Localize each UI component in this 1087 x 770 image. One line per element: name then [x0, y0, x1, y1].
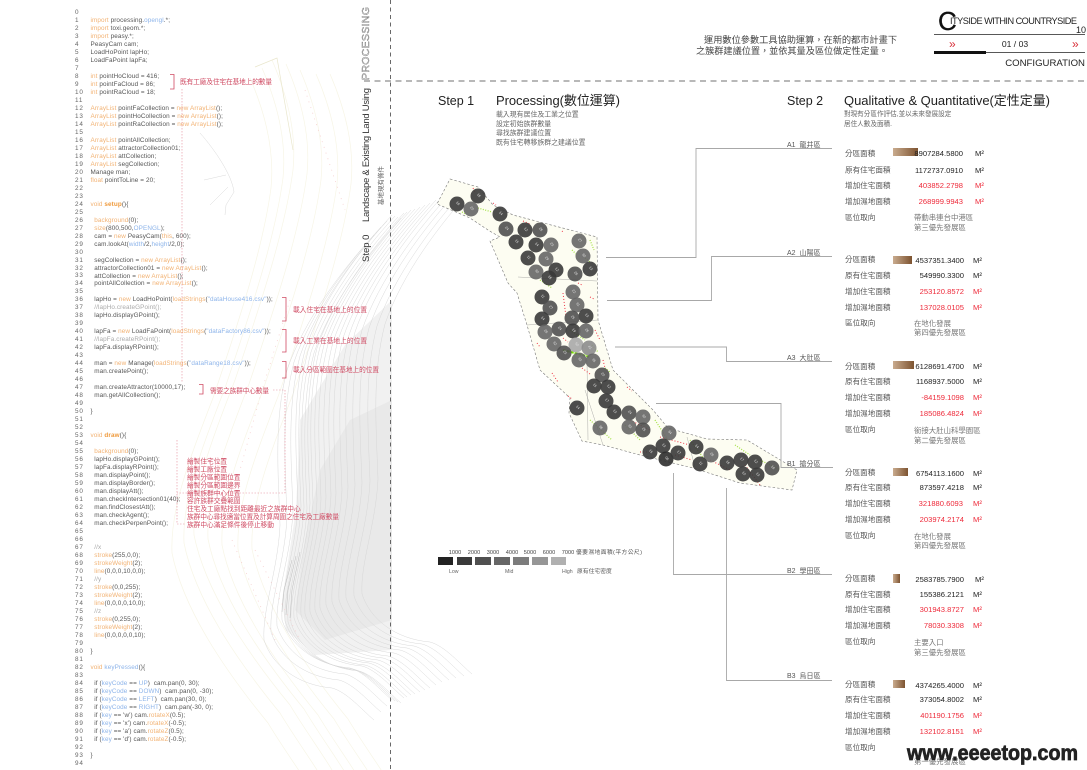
zone A3: 1168937.5000 [916, 377, 964, 386]
zone A2: 253120.8572 [920, 287, 964, 296]
cluster circles: 17 [739, 457, 745, 462]
zone B2: M² [973, 605, 982, 614]
cluster circles: 23 [549, 242, 555, 247]
cluster circles: 13 [588, 266, 594, 271]
zone A1: 403852.2798 [919, 181, 963, 190]
cluster circles: 32 [552, 341, 558, 346]
zone B3: 分區面積 [845, 679, 876, 689]
cluster circles: 11 [540, 294, 545, 299]
step 2 heading [787, 93, 1050, 128]
cluster circles: 17 [604, 398, 610, 403]
cluster circles: 11 [526, 255, 531, 260]
zone A3 [787, 353, 982, 445]
zone B3: M² [973, 727, 982, 736]
cluster circles: 12 [753, 459, 759, 464]
zone B1: 增加濕地面積 [845, 514, 891, 524]
zone B2: 區位取向 [845, 636, 875, 646]
zone B2: 78030.3308 [924, 621, 964, 630]
density legend: 5000 [524, 550, 536, 556]
cluster circles: 14 [534, 242, 540, 247]
cluster circles: 18 [770, 465, 776, 470]
zone B1: 在地化發展 [914, 532, 952, 541]
vertical section titles: Step 0 [361, 235, 372, 262]
zone B2: M² [973, 590, 982, 599]
code annotations: 載入工業在基地上的位置 [293, 336, 367, 345]
zone A1: 268999.9943 [919, 197, 963, 206]
zone A1: 1172737.0910 [915, 166, 963, 175]
code annotations: 容許族群交疊範圍 [187, 496, 241, 505]
zone B3: 原有住宅面積 [845, 694, 891, 704]
zone A2: 第四優先發展區 [914, 328, 966, 337]
zone A2 [787, 248, 982, 337]
zone A3: -84159.1098 [921, 393, 964, 402]
zone A1: M² [975, 166, 984, 175]
cluster circles: 16 [547, 275, 553, 280]
cluster circles: 25 [570, 315, 576, 320]
zone B2: 第三優先發展區 [914, 648, 966, 657]
step 1 heading: 設定初始族群數量 [496, 119, 551, 128]
cluster circles: 24 [504, 226, 510, 231]
code annotations: 族群中心尋找適當位置及計算周圍之住宅及工廠數量 [187, 512, 339, 521]
cluster circles: 30 [534, 269, 540, 274]
watermark: www.eeeetop.com [906, 742, 1078, 765]
zone B3: 區位取向 [845, 742, 875, 752]
code annotations: 載入住宅在基地上的位置 [293, 305, 367, 314]
header block: C [938, 6, 957, 36]
vertical section titles: Landscape & Existing Land Using [361, 88, 372, 222]
zone A1: A1 龍井區 [787, 140, 820, 149]
intro text: 運用數位參數工具協助運算，在新的都市計畫下 [704, 34, 897, 45]
vertical section titles: 基地現有條件 [376, 166, 385, 205]
zone A1: M² [975, 181, 984, 190]
zone A2: 原有住宅面積 [845, 270, 891, 280]
cluster circles: 19 [571, 328, 577, 333]
cluster circles: 24 [557, 326, 563, 331]
header block: CONFIGURATION [1005, 58, 1085, 69]
zone A2: 增加濕地面積 [845, 302, 891, 312]
density legend: 優要濕地面積(平方公尺) [576, 548, 642, 556]
zone B2: M² [973, 621, 982, 630]
zone B1: 873597.4218 [920, 483, 964, 492]
density legend: High [562, 569, 573, 575]
cluster circles: 26 [538, 227, 544, 232]
density legend: 原有住宅密度 [577, 567, 612, 575]
zone B2: 原有住宅面積 [845, 589, 891, 599]
zone A2: 4537351.3400 [915, 256, 964, 265]
zone A1: 帶動串連台中港區 [914, 213, 974, 222]
zone A1: 第三優先發展區 [914, 223, 966, 232]
cluster circles: 14 [498, 211, 504, 216]
zone B3 [787, 671, 982, 766]
cluster circles: 24 [627, 410, 633, 415]
code annotations: 住宅及工廠點找到距離最近之族群中心 [187, 504, 301, 513]
zone B1: M² [973, 499, 982, 508]
density legend: 4000 [506, 550, 518, 556]
site boundary [437, 179, 797, 490]
zone A3: 增加濕地面積 [845, 408, 891, 418]
cluster circles: 25 [641, 427, 647, 432]
zone A2: 在地化發展 [914, 319, 952, 328]
step 1 heading: Processing(數位運算) [496, 93, 620, 108]
zone B3: 373054.8002 [920, 695, 964, 704]
code annotations: 族群中心滿足條件後停止移動 [187, 520, 274, 529]
cluster circles: 33 [577, 357, 583, 362]
cluster circles: 13 [755, 472, 761, 477]
cluster circles: 41 [587, 345, 593, 350]
zone A3: 分區面積 [845, 361, 876, 371]
zone A1: M² [975, 149, 984, 158]
cluster circles: 15 [592, 383, 598, 388]
density legend: 3000 [487, 550, 499, 556]
zone B2: 2583785.7900 [915, 575, 964, 584]
zone A2: 增加住宅面積 [845, 286, 891, 296]
zone A3: 6128691.4700 [915, 362, 964, 371]
cluster circles: 28 [543, 329, 549, 334]
cluster circles: 20 [600, 372, 606, 377]
zone B2 [787, 566, 984, 657]
zone B2: 增加住宅面積 [845, 604, 891, 614]
zone A2: 分區面積 [845, 254, 876, 264]
cluster circles: 33 [627, 424, 633, 429]
zone A3: M² [973, 362, 982, 371]
cluster circles: 28 [709, 452, 715, 457]
zone A1: M² [975, 197, 984, 206]
code annotations: 載入分區範圍在基地上的位置 [293, 365, 379, 374]
zone B1: 增加住宅面積 [845, 498, 891, 508]
cluster circles: 36 [598, 425, 604, 430]
code annotations: 需要之族群中心數量 [210, 386, 269, 395]
cluster circles: 17 [676, 450, 682, 455]
processing source code: import processing.opengl.*; import toxi.geom.*; import peasy.*; PeasyCam cam; LoadHoPoint lapHo; LoadFaPoint lapFa; int pointHoCloud = 416; int pointFaCloud = 86; int pointRaCloud = 18; ArrayList pointFaCollection = new ArrayList(); ArrayList pointHoCollection = new ArrayList(); ArrayList pointRaCollection = new ArrayList(); ArrayList pointAllCollection; ArrayList attractorCollection01; ArrayList attCollection; ArrayList segCollection; Manage man; float pointToLine = 20; void setup(){ background(0); size(800,500,OPENGL); cam = new PeasyCam(this, 600); cam.lookAt(width/2,height/2,0); segCollection = new ArrayList(); attractorCollection01 = new ArrayList(); attCollection = new ArrayList(); pointAllCollection = new ArrayList(); lapHo = new LoadHoPoint(loadStrings("dataHouse416.csv")); //lapHo.createGPoint(); lapHo.displayGPoint(); lapFa = new LoadFaPoint(loadStrings("dataFactory86.csv")); //lapFa.createRPoint(); lapFa.displayRPoint(); man = new Manage(loadStrings("dataRange18.csv")); man.createPoint(); man.createAttractor(10000,17); man.getAllCollection(); } void draw(){ background(0); lapHo.displayGPoint(); lapFa.displayRPoint(); man.displayPoint(); man.displayBorder(); man.displayAtt(); man.checkIntersection01(40); man.findClosestAtt(); man.checkAgent(); man.checkPerpenPoint(); //x stroke(255,0,0); strokeWeight(2); line(0,0,0,10,0,0); //y stroke(0,0,255); strokeWeight(2); line(0,0,0,0,10,0); //z stroke(0,255,0); strokeWeight(2); line(0,0,0,0,0,10); } void keyPressed(){ if (keyCode == UP) cam.pan(0, 30); if (keyCode == DOWN) cam.pan(0, -30); if (keyCode == LEFT) cam.pan(30, 0); if (keyCode == RIGHT) cam.pan(-30, 0); if (key == 'w') cam.rotateX(0.5); if (key == 'x') cam.rotateX(-0.5); if (key == 'a') cam.rotateZ(0.5); if (key == 'd') cam.rotateZ(-0.5); } [90, 17, 273, 759]
header block [934, 6, 1086, 69]
step 1 heading [438, 93, 620, 146]
zone B3: 增加濕地面積 [845, 726, 891, 736]
green dots [462, 208, 780, 470]
density legend: Low [449, 569, 459, 575]
zone A2: A2 山陽區 [787, 248, 820, 257]
cluster circles: 29 [544, 256, 550, 261]
step 1 heading: Step 1 [438, 94, 474, 108]
cluster circles: 28 [573, 271, 579, 276]
code annotations: 繪製分區範圍邊界 [187, 480, 241, 490]
density legend: Mid [505, 569, 513, 575]
zone B1: 6754113.1600 [916, 469, 964, 478]
cluster circles: 12 [554, 267, 560, 272]
zone A3: 區位取向 [845, 424, 875, 434]
cluster circles: 08 [664, 456, 670, 461]
zone B3: 401190.1756 [920, 711, 964, 720]
cluster circles: 10 [741, 471, 747, 476]
cluster circles [450, 188, 780, 482]
cluster circles: 34 [667, 430, 673, 435]
zone B1: 第四優先發展區 [914, 541, 966, 550]
header block: 01 / 03 [1002, 39, 1028, 49]
zone A1 [787, 140, 984, 232]
vertical section titles: PROCESSING [360, 7, 372, 80]
cluster circles: 27 [577, 238, 583, 243]
cluster circles: 31 [575, 302, 581, 307]
cluster circles: 14 [540, 316, 546, 321]
header block: 10 [1076, 25, 1086, 35]
cluster circles: 27 [548, 305, 554, 310]
cluster circles: 16 [476, 193, 482, 198]
zone A1: 區位取向 [845, 212, 875, 222]
density legend: 2000 [468, 550, 480, 556]
cluster circles: 13 [661, 443, 667, 448]
zone B2: 155386.2121 [920, 590, 964, 599]
line numbers: 0 1 2 3 4 5 6 7 8 9 10 11 12 13 14 15 16 17 18 19 20 21 22 23 24 25 26 27 28 29 30 31 32 33 34 35 36 37 38 39 40 41 42 43 44 45 46 47 48 49 50 51 52 53 54 55 56 57 58 59 60 61 62 63 64 65 66 67 68 69 70 71 72 73 74 75 76 77 78 79 80 81 82 83 84 85 86 87 88 89 90 91 92 93 94 [75, 9, 84, 767]
zone A3: 銜接大肚山科學園區 [914, 426, 981, 435]
zone A3: A3 大肚區 [787, 353, 820, 362]
zone B3: 4374265.4000 [915, 681, 964, 690]
step 2 heading: 居住人數及面積. [844, 119, 892, 128]
site map [437, 179, 797, 490]
density legend: 6000 [543, 550, 555, 556]
zone A1: 8907284.5800 [914, 149, 963, 158]
zone A1: 分區面積 [845, 148, 876, 158]
zone B3: 132102.8151 [920, 727, 964, 736]
zone B3: M² [973, 711, 982, 720]
zone B2: 增加濕地面積 [845, 620, 891, 630]
density legend [438, 548, 642, 575]
cluster circles: 12 [606, 384, 612, 389]
cluster circles: 30 [641, 414, 647, 419]
code annotations: 既有工廠及住宅在基地上的數量 [180, 77, 272, 86]
intro text [696, 34, 897, 56]
zone B1: B1 搶分區 [787, 459, 820, 468]
code annotations: 繪製分區範圍位置 [187, 472, 241, 482]
zone A2: M² [973, 303, 982, 312]
zone B1: M² [973, 469, 982, 478]
zone A2: 549990.3300 [920, 271, 964, 280]
header block: » [1072, 37, 1079, 51]
zone B1: M² [973, 483, 982, 492]
cluster circles: 50 [574, 342, 580, 347]
cluster circles: 15 [514, 239, 520, 244]
zone B1: 分區面積 [845, 467, 876, 477]
cluster circles: 14 [575, 405, 581, 410]
zone A3: 增加住宅面積 [845, 392, 891, 402]
cluster circles: 11 [698, 461, 703, 466]
step 2 heading: Step 2 [787, 94, 823, 108]
vertical section titles [360, 7, 385, 262]
zone B3: 增加住宅面積 [845, 710, 891, 720]
cluster circles: 23 [562, 350, 568, 355]
zone B3: 第一優先發展區 [914, 757, 966, 766]
cluster circles: 22 [571, 289, 577, 294]
zone A1: 原有住宅面積 [845, 164, 891, 174]
red dots [473, 188, 760, 485]
cluster circles: 15 [648, 449, 654, 454]
step 1 heading: 尋找族群建議位置 [496, 128, 551, 137]
intro text: 之簇群建議位置，並依其量及區位做定性定量。 [696, 45, 888, 56]
cluster circles: 12 [523, 227, 529, 232]
zone A2: 區位取向 [845, 318, 875, 328]
zone A3: 原有住宅面積 [845, 376, 891, 386]
code annotations [170, 74, 379, 529]
cluster circles: 13 [612, 409, 618, 414]
density legend: 7000 [562, 550, 574, 556]
zone A3: M² [973, 393, 982, 402]
zone A2: 137028.0105 [920, 303, 964, 312]
step 1 heading: 載入現有居住及工業之位置 [496, 110, 579, 118]
cluster circles: 18 [455, 201, 461, 206]
cluster circles: 13 [584, 313, 590, 318]
cluster circles: 30 [581, 253, 587, 258]
zone B3: M² [973, 695, 982, 704]
zone B1: M² [973, 515, 982, 524]
dashed dividers [364, 0, 1087, 770]
zone A3: M² [973, 409, 982, 418]
zone B2: 分區面積 [845, 573, 876, 583]
cluster circles: 14 [694, 444, 700, 449]
step 2 heading: Qualitative & Quantitative(定性定量) [844, 93, 1050, 108]
zone A3: M² [973, 377, 982, 386]
zone B3: M² [973, 681, 982, 690]
zone A1: 增加住宅面積 [845, 180, 891, 190]
code annotations: 繪製住宅位置 [187, 456, 227, 466]
zone A2: M² [973, 287, 982, 296]
zone B1: 原有住宅面積 [845, 482, 891, 492]
zone B3: B3 烏日區 [787, 671, 820, 680]
cluster circles: 20 [469, 206, 475, 211]
zone B1 [787, 459, 982, 550]
header block: » [949, 37, 956, 51]
step 2 heading: 對現有分區作評估,並以未來發展設定 [844, 109, 952, 118]
zone B1: 203974.2174 [920, 515, 964, 524]
zone B2: M² [975, 575, 984, 584]
zone B2: 主要入口 [914, 638, 944, 647]
zone B2: 301943.8727 [920, 605, 964, 614]
step 1 heading: 既有住宅轉移族群之建議位置 [496, 138, 586, 146]
header block: ITYSIDE WITHIN COUNTRYSIDE [950, 16, 1077, 26]
density legend: 1000 [449, 550, 461, 556]
cluster circles: 35 [591, 358, 597, 363]
cluster circles: 26 [584, 328, 590, 333]
code annotations: 繪製工廠位置 [187, 464, 227, 474]
zone A2: M² [973, 256, 982, 265]
zone A1: 增加濕地面積 [845, 196, 891, 206]
code annotations: 繪製族群中心位置 [187, 488, 241, 498]
zone A3: 第二優先發展區 [914, 436, 966, 445]
cluster circles: 16 [725, 460, 731, 465]
zone A3: 185086.4824 [920, 409, 964, 418]
zone B2: B2 學田區 [787, 566, 820, 575]
leader lines [606, 148, 833, 680]
zone B1: 區位取向 [845, 530, 875, 540]
zone A2: M² [973, 271, 982, 280]
zone B1: 321880.6093 [919, 499, 963, 508]
